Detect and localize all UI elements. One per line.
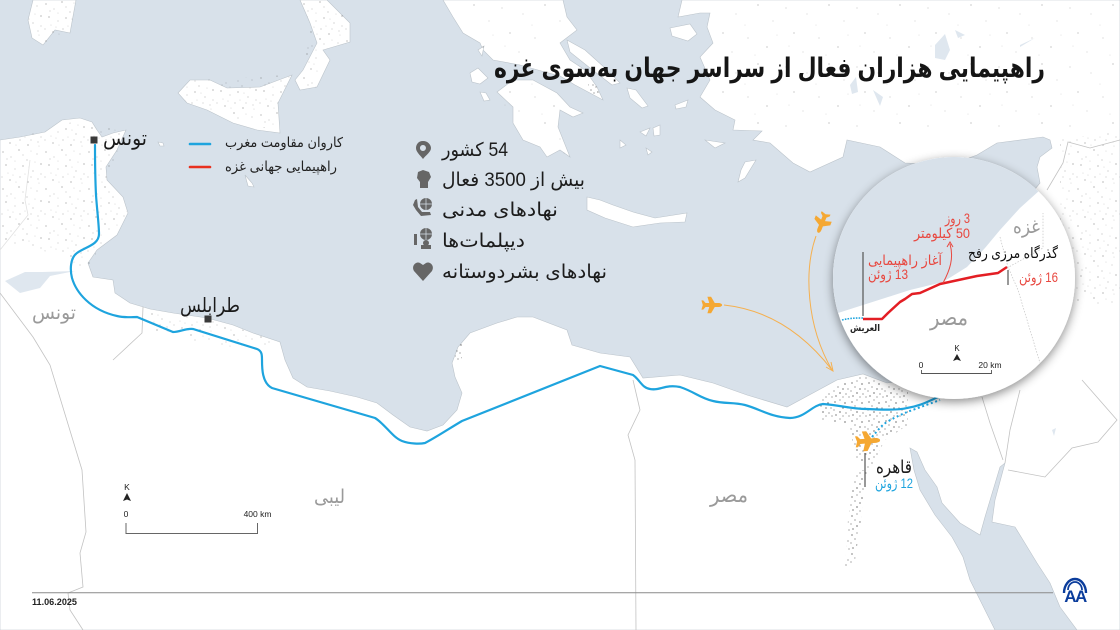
legend: blue label: کاروان مقاومت مغرب: [225, 135, 344, 151]
city: Tripoli: طرابلس: [180, 295, 240, 317]
city: Cairo: 12 ژوئن: [875, 475, 913, 492]
lens scale bar: K: [954, 344, 960, 353]
logo: Anadolu Agency: [1064, 579, 1087, 606]
route: Maghreb resistance caravan: [71, 145, 938, 444]
label: Egypt in lens: مصر: [929, 305, 968, 330]
land: Italy, Calabria: [295, 0, 350, 90]
stipple: Tripoli coast: [150, 310, 280, 352]
icon: plane Cairo: [855, 430, 881, 452]
marker line Al-Arish: [862, 252, 864, 316]
country label: Egypt: مصر: [709, 484, 748, 507]
stipple: Sicily and Italy: [28, 0, 350, 133]
stipple: Turkey and Greece sparse: [445, 0, 1120, 157]
country borders: [0, 140, 1120, 630]
country label: Libya: لیبی: [314, 487, 345, 508]
stipple: Levant: [1060, 130, 1120, 310]
main scale bar: 400 km: [244, 509, 271, 519]
land: Ionian islands: [470, 46, 490, 101]
main scale bar: K: [124, 482, 130, 492]
footer rule: [32, 592, 1053, 594]
city: Tunis: تونس: [103, 128, 147, 150]
text: over 3500 activists: بیش از 3500 فعال: [442, 170, 585, 191]
label: June 13: 13 ژوئن: [868, 266, 908, 283]
icon: raised fist: [417, 170, 431, 188]
city: Cairo: [865, 453, 913, 492]
stipple: Nile delta: [820, 376, 908, 470]
label: march start: آغاز راهپیمایی: [868, 252, 943, 269]
lens scale bar: [919, 344, 1002, 374]
lens scale bar: 20 km: [978, 360, 1002, 370]
land: Sicily: [178, 75, 292, 133]
lakes: [5, 30, 1056, 436]
land: Aegean islands: [620, 24, 756, 182]
text: 54 countries: 54 کشور: [441, 140, 508, 161]
legend: [190, 135, 344, 175]
land: small islands near Tunisia: [158, 142, 254, 187]
lens sea: [833, 157, 1038, 313]
label: 50 km: 50 کیلومتر: [913, 225, 970, 242]
text: civil institutions: نهادهای مدنی: [442, 200, 558, 221]
flight arrow: west: [724, 305, 833, 371]
stipple: Benghazi and Athens clusters: [455, 84, 599, 362]
label: Al-Arish: العریش: [850, 323, 880, 334]
marker line Rafah: [1007, 270, 1009, 285]
text: diplomats: دیپلمات‌ها: [442, 231, 525, 252]
Red Sea: [910, 448, 1077, 630]
lens blue dotted route: [842, 318, 863, 320]
key facts list: [413, 140, 607, 283]
legend: red route: [190, 166, 210, 168]
lens borders: [1000, 213, 1043, 363]
legend: blue route: [190, 143, 210, 145]
zoom lens: Rafah detail: [820, 150, 1075, 399]
stipple: Nile valley: [845, 470, 868, 570]
lake: Tunisian chotts: [5, 271, 75, 293]
stipple: Tunisia and Algeria coast: [0, 120, 128, 275]
label: Rafah crossing: گذرگاه مرزی رفح: [968, 245, 1058, 262]
icon: location pin: [416, 141, 431, 159]
land: Sardinia: [28, 0, 76, 45]
land: Crete: [587, 197, 687, 227]
land: Greece mainland: [443, 0, 603, 100]
icon: plane west: [701, 297, 722, 313]
icon: globe with diplomat: [414, 228, 432, 249]
icon: globe with hands: [413, 198, 432, 216]
country label: Tunisia: تونس: [32, 303, 76, 324]
label: Gaza: غزه: [1013, 217, 1040, 238]
icon: heart handshake: [413, 263, 433, 281]
legend: red label: راهپیمایی جهانی غزه: [225, 159, 337, 175]
label: June 16: 16 ژوئن: [1019, 269, 1058, 286]
flight arrow: north: [809, 236, 832, 370]
main scale bar: 0: [124, 509, 129, 519]
main scale bar: [123, 482, 271, 534]
city: Cairo: قاهره: [876, 457, 912, 478]
lake: north Arabia: [1052, 428, 1056, 436]
red arrow to sea: [943, 242, 953, 283]
icon: plane north: [810, 210, 834, 236]
date: 11.06.2025: [32, 597, 77, 607]
route: dotted link from Cairo: [872, 400, 940, 437]
land: Peloponnese: [497, 80, 583, 157]
land: Euboea: [567, 40, 620, 85]
logo: Anadolu Agency: AA: [1064, 587, 1087, 606]
label: 3 days: 3 روز: [944, 210, 970, 227]
text: humanitarian institutions: نهادهای بشردوستانه: [442, 262, 607, 283]
lens scale bar: 0: [919, 360, 924, 370]
lens red route: [863, 267, 1007, 319]
lakes: Turkey: [850, 30, 1035, 106]
